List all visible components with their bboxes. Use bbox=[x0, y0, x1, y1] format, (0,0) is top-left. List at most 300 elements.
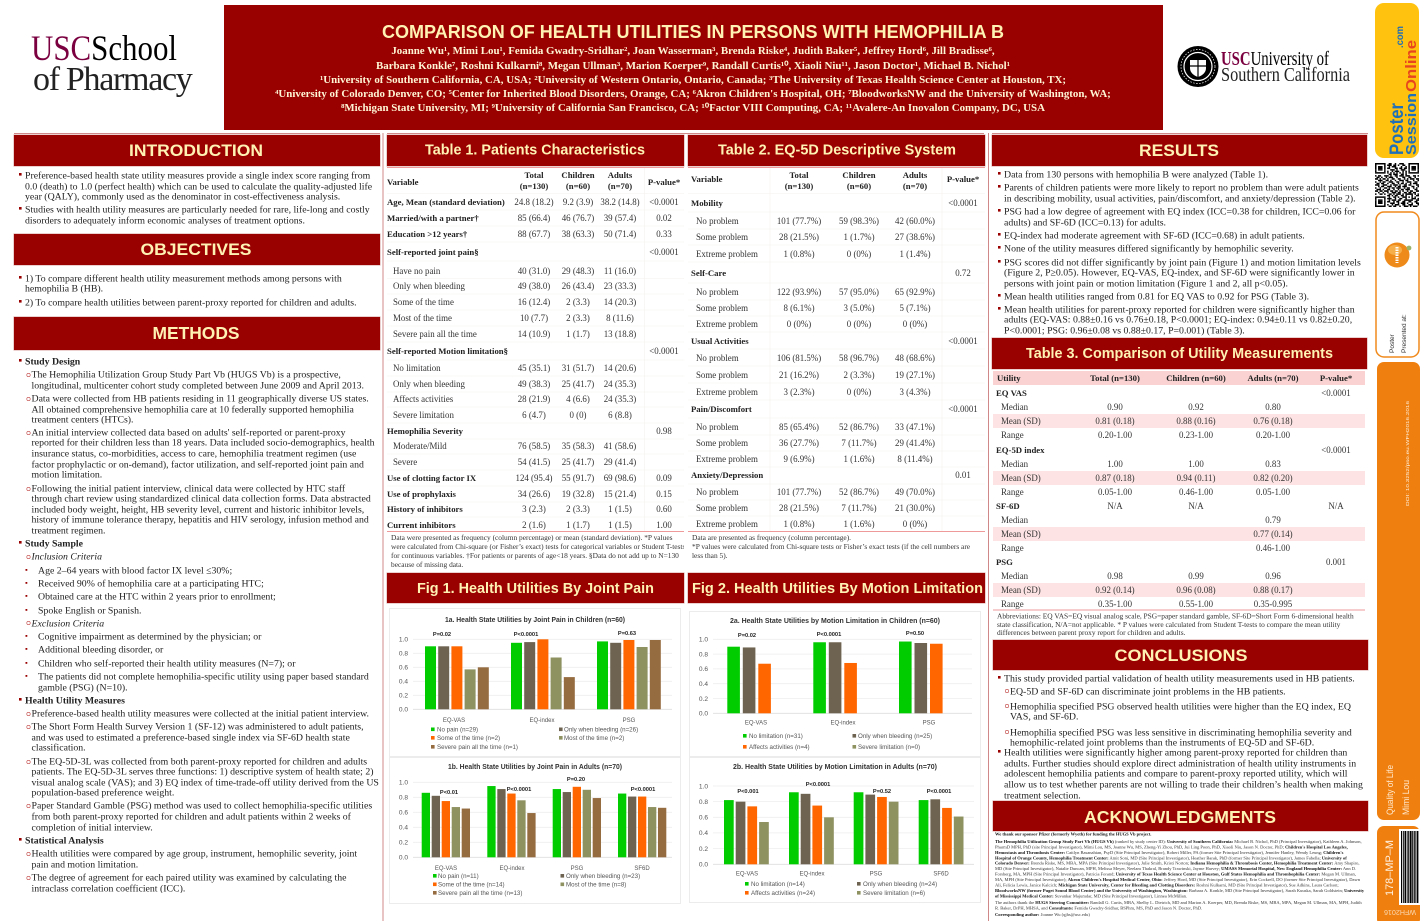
table: comparison of utility measurements: Range bbox=[1001, 430, 1024, 440]
text block: methods: Age 2–64 years with blood factor IX level ≤30%; bbox=[38, 566, 232, 577]
table: EQ-5D descriptive system: 1 (1.7%) bbox=[843, 232, 875, 242]
table: comparison of utility measurements: PSG bbox=[996, 557, 1013, 567]
table: patients characteristics: Use of clotting factor IX bbox=[387, 473, 477, 483]
text block: results bullets: adults) and SF-6D (ICC=0.13) for adults. bbox=[1004, 218, 1166, 229]
table: comparison of utility measurements: 0.35-1.00 bbox=[1098, 599, 1133, 609]
table: EQ-5D descriptive system: Extreme problem bbox=[696, 387, 758, 397]
table: patients characteristics: 34 (26.6) bbox=[518, 489, 550, 499]
table: patients characteristics: 85 (66.4) bbox=[518, 213, 550, 223]
chart: 2b motion limitation in adults: Affects activities (n=24) bbox=[751, 890, 815, 897]
heading: table 1: Table 1. Patients Characteristics bbox=[425, 142, 645, 158]
text block: methods: history of immune tolerance therapy, hepatitis and HIV serology, infusion method and bbox=[32, 515, 369, 526]
table: patients characteristics: 124 (95.4) bbox=[516, 473, 553, 483]
table: patients characteristics: 28 (21.9) bbox=[518, 394, 550, 404]
panel: acknowledgments bbox=[992, 800, 1368, 917]
heading: table 2: Table 2. EQ-5D Descriptive System bbox=[718, 142, 956, 158]
heading: figure 2: Fig 2. Health Utilities By Motion Limitation bbox=[692, 581, 983, 597]
table: patients characteristics: 41 (58.6) bbox=[604, 441, 636, 451]
table: patients characteristics: 0.98 bbox=[656, 426, 672, 436]
table: patients characteristics: 10 (7.7) bbox=[520, 313, 548, 323]
chart: 1a joint pain in children: 0.4 bbox=[399, 679, 408, 686]
table: EQ-5D descriptive system: 27 (38.6%) bbox=[895, 232, 935, 242]
table: EQ-5D descriptive system: 36 (27.7%) bbox=[779, 438, 819, 448]
chart: 2a motion limitation in children: P<0.0001 bbox=[817, 632, 841, 638]
text block: methods: through chart review using standardized clinical data collection forms. Data abstracted bbox=[32, 494, 371, 505]
table: comparison of utility measurements: Total (n=130) bbox=[1090, 373, 1140, 383]
table: patients characteristics: 29 (48.3) bbox=[562, 266, 594, 276]
chart: 1b joint pain in adults: Only when bleeding (n=23) bbox=[566, 873, 640, 880]
text block: methods: longitudinal, multicenter cohort study completed between June 2009 and April 2013. bbox=[32, 381, 364, 392]
table: EQ-5D descriptive system: 8 (6.1%) bbox=[783, 303, 815, 313]
text block: methods: Statistical Analysis bbox=[25, 836, 104, 847]
chart: 1a joint pain in children: P=0.63 bbox=[618, 631, 636, 637]
table 3 footnote bbox=[997, 612, 1354, 637]
text block: methods: Paper Standard Gamble (PSG) method was used to collect hemophilia-specific utilities bbox=[32, 801, 372, 812]
table: EQ-5D descriptive system: 8 (11.4%) bbox=[897, 454, 933, 464]
table: EQ-5D descriptive system: 101 (77.7%) bbox=[777, 487, 821, 497]
chart: 2b motion limitation in adults: Only when bleeding (n=24) bbox=[863, 881, 937, 888]
sidebar: PosterSessionOnline badge: Poster bbox=[1387, 102, 1408, 155]
table: EQ-5D descriptive system: Some problem bbox=[696, 438, 748, 448]
chart: 2a motion limitation in children: Only when bleeding (n=25) bbox=[858, 733, 932, 740]
sidebar: orange DOI and topic band: Quality of Life bbox=[1385, 765, 1395, 815]
chart: 1b joint pain in adults: EQ-index bbox=[499, 866, 525, 872]
table: comparison of utility measurements: 0.88 (0.16) bbox=[1176, 416, 1216, 426]
table: patients characteristics: 2 (3.3) bbox=[566, 504, 590, 514]
table: EQ-5D descriptive system: 3 (2.3%) bbox=[783, 387, 815, 397]
text block: methods: population-based preference weight. bbox=[32, 788, 174, 799]
text block: conclusions bullets: hemophilic-related joint problems than the instruments of EQ-5D and SF-6D. bbox=[1010, 738, 1314, 749]
table: comparison of utility measurements: SF-6D bbox=[996, 501, 1020, 511]
table: patients characteristics: History of inhibitors bbox=[387, 504, 463, 514]
table: EQ-5D descriptive system: <0.0001 bbox=[948, 336, 978, 346]
table: EQ-5D descriptive system: No problem bbox=[696, 216, 739, 226]
heading: conclusions: CONCLUSIONS bbox=[1114, 646, 1248, 665]
chart: 2a motion limitation in children: EQ-index bbox=[830, 720, 856, 726]
table: patients characteristics: 88 (67.7) bbox=[518, 229, 550, 239]
chart: 1a joint pain in children: 1.0 bbox=[399, 637, 408, 644]
table: patients characteristics: 2 (3.3) bbox=[566, 297, 590, 307]
table: comparison of utility measurements: 0.96 (0.08) bbox=[1176, 585, 1216, 595]
chart: 2b motion limitation in adults: PSG bbox=[870, 872, 883, 878]
table: patients characteristics: Use of prophylaxis bbox=[387, 489, 456, 499]
text block: methods: treatment centers (HTCs). bbox=[32, 415, 134, 426]
table: patients characteristics: <0.0001 bbox=[649, 197, 679, 207]
table: patients characteristics: No limitation bbox=[393, 363, 441, 373]
text block: methods: Following the initial patient interview, clinical data were collected by HTC staff bbox=[32, 484, 346, 495]
table: patients characteristics: 25 (41.7) bbox=[562, 457, 594, 467]
text block: conclusions bullets bbox=[998, 674, 1363, 800]
chart: 1b joint pain in adults: 0.6 bbox=[399, 810, 408, 817]
table: EQ-5D descriptive system: Some problem bbox=[696, 370, 748, 380]
text block: methods: Health Utility Measures bbox=[25, 696, 125, 707]
table: comparison of utility measurements: N/A bbox=[1328, 501, 1344, 511]
text block: introduction bullets: year (QALY), commonly used as the denominator in cost-effectiveness analysis. bbox=[25, 192, 340, 203]
table: comparison of utility measurements: 0.80 bbox=[1265, 402, 1281, 412]
sidebar: presented-at box: Poster bbox=[1389, 333, 1396, 353]
text block: acknowledgments: BloodworksNW (former Puget Sound Blood Center) and the University of Washington, Washington: Barbara A. Konkle, MD (Site Principal Investigator), Sarah Kuuska, Sarah Goldstein; University bbox=[995, 888, 1365, 894]
text block: conclusions bullets: VAS, and SF-6D. bbox=[1010, 712, 1078, 723]
chart: 2a motion limitation in children: Affects activities (n=4) bbox=[749, 744, 810, 751]
chart: 2a motion limitation in children: 0.0 bbox=[699, 711, 708, 718]
table: EQ-5D descriptive system: 0 (0%) bbox=[847, 319, 871, 329]
table: comparison of utility measurements: 0.46-1.00 bbox=[1256, 543, 1291, 553]
barcode bbox=[1401, 831, 1418, 903]
table: comparison of utility measurements: 0.05-1.00 bbox=[1256, 487, 1291, 497]
table: patients characteristics: Married/with a partner† bbox=[387, 213, 479, 223]
table: comparison of utility measurements: N/A bbox=[1107, 501, 1123, 511]
text block: conclusions bullets: This study provided partial validation of health utility measurements used in HB patients. bbox=[1004, 674, 1355, 685]
table: patients characteristics: 49 (38.3) bbox=[518, 379, 550, 389]
chart: 1b joint pain in adults: 0.0 bbox=[399, 855, 408, 862]
table: EQ-5D descriptive system: Extreme problem bbox=[696, 249, 758, 259]
chart: 2b motion limitation in adults: P<0.001 bbox=[737, 789, 759, 795]
table: EQ-5D descriptive system: 3 (5.0%) bbox=[843, 303, 875, 313]
chart: 1a joint pain in children: 0.0 bbox=[399, 707, 408, 714]
chart: 2a motion limitation in children: 2a. Health State Utilities by Motion Limitation in Children (n=60) bbox=[730, 618, 940, 625]
sidebar: PosterSessionOnline badge bbox=[1375, 3, 1419, 158]
table: comparison of utility measurements: 1.00 bbox=[1107, 459, 1123, 469]
text block: methods: Exclusion Criteria bbox=[30, 619, 104, 630]
table: comparison of utility measurements: N/A bbox=[1188, 501, 1204, 511]
table: EQ-5D descriptive system: 1 (0.8%) bbox=[783, 249, 815, 259]
table: EQ-5D descriptive system: 2 (3.3%) bbox=[843, 370, 875, 380]
table: EQ-5D descriptive system: 21 (30.0%) bbox=[895, 503, 935, 513]
table: patients characteristics: Affects activities bbox=[393, 394, 454, 404]
table: patients characteristics: 2 (3.3) bbox=[566, 313, 590, 323]
table: patients characteristics: 25 (41.7) bbox=[562, 379, 594, 389]
table: patients characteristics: (n=130) bbox=[520, 181, 548, 191]
table: comparison of utility measurements: P-value* bbox=[1320, 373, 1352, 383]
logo: University of Southern California bbox=[1178, 46, 1350, 87]
text block: methods: Spoke English or Spanish. bbox=[38, 606, 141, 617]
table: patients characteristics: 2 (1.6) bbox=[522, 520, 546, 530]
chart: 2b motion limitation in adults: P<0.0001 bbox=[806, 782, 830, 788]
text block: methods: completion of initial interview. bbox=[32, 823, 153, 834]
table: patients characteristics: 24.8 (18.2) bbox=[514, 197, 554, 207]
table: patients characteristics: (n=70) bbox=[608, 181, 632, 191]
text block: methods: Children who self-reported their health utility measures (N=7); or bbox=[38, 659, 296, 670]
chart: 2b motion limitation in adults: 0.2 bbox=[699, 846, 708, 853]
heading: methods bbox=[14, 317, 380, 350]
table: patients characteristics: 11 (16.0) bbox=[604, 266, 636, 276]
table: patients characteristics: P-value* bbox=[648, 177, 680, 187]
panel: conclusions bbox=[992, 640, 1368, 800]
table: comparison of utility measurements: 0.20-1.00 bbox=[1098, 430, 1133, 440]
logo: USC School of Pharmacy: of Pharmacy bbox=[33, 61, 193, 98]
table: patients characteristics: 24 (35.3) bbox=[604, 394, 636, 404]
text block: conclusions bullets: Health utilities were significantly higher among parent-proxy reported for children than bbox=[1004, 748, 1347, 759]
text block: methods: Study Sample bbox=[25, 539, 84, 550]
chart: 1b joint pain in adults: P<0.0001 bbox=[631, 787, 655, 793]
table: patients characteristics: 1 (1.5) bbox=[608, 520, 632, 530]
text block: results bullets: Parents of children patients were more likely to report no problem than were adult patients bbox=[1004, 183, 1359, 194]
table: patients characteristics: 23 (33.3) bbox=[604, 281, 636, 291]
chart: 1a joint pain in children: 0.2 bbox=[399, 693, 408, 700]
chart: 2b motion limitation in adults: 1.0 bbox=[699, 783, 708, 790]
chart: 1b joint pain in adults: 1b. Health State Utilities by Joint Pain in Adults (n=70) bbox=[448, 764, 622, 771]
text block: conclusions bullets: Hemophilia specified PSG was less sensitive in discriminating hemophilia severity and bbox=[1010, 728, 1352, 739]
text block: acknowledgments: MA, MPH (Site Principal Investigator); Akron Children's Hospital Medical Center, Ohio: Jeffrey Hord, MD (Site Principal Investigator), Erin Cockrell, DO (former Site Principal Investigator), Dawn bbox=[995, 877, 1361, 883]
text block: conclusions bullets: allow us to test whether parents are not willing to trade their children’s health when making bbox=[1004, 780, 1363, 791]
table: EQ-5D descriptive system: (n=130) bbox=[785, 181, 813, 191]
chart: 2b motion limitation in adults: SF6D bbox=[933, 872, 949, 878]
table: comparison of utility measurements: 0.23-1.00 bbox=[1179, 430, 1214, 440]
logo: USC School of Pharmacy: USCSchool bbox=[31, 28, 177, 68]
table 1 footnote: because of missing data. bbox=[391, 560, 463, 569]
table: EQ-5D descriptive system: 0 (0%) bbox=[847, 387, 871, 397]
table: patients characteristics: 15 (21.4) bbox=[604, 489, 636, 499]
table: comparison of utility measurements: <0.0001 bbox=[1321, 388, 1351, 398]
table: patients characteristics: 14 (10.9) bbox=[518, 329, 550, 339]
table: patients characteristics: 24 (35.3) bbox=[604, 379, 636, 389]
panel: table 1 bbox=[386, 134, 684, 569]
heading: introduction: INTRODUCTION bbox=[129, 141, 263, 160]
sidebar: presented-at box: Presented at: bbox=[1401, 314, 1408, 353]
table: EQ-5D descriptive system bbox=[688, 167, 985, 532]
text block: introduction bullets bbox=[19, 171, 373, 227]
table: EQ-5D descriptive system: Extreme problem bbox=[696, 519, 758, 529]
table: patients characteristics: 0.33 bbox=[656, 229, 672, 239]
table: EQ-5D descriptive system: Some problem bbox=[696, 503, 748, 513]
text block: methods: motion limitation. bbox=[32, 470, 102, 481]
text block: methods: All obtained comprehensive hemophilia care at 10 federally supported hemophilia bbox=[32, 405, 355, 416]
chart: 1b joint pain in adults: EQ-VAS bbox=[435, 866, 457, 872]
chart: 2b motion limitation in adults: EQ-index bbox=[799, 872, 825, 878]
text block: results bullets: (Figure 2, P≥0.05). However, EQ-VAS, EQ-index, and SF-6D were significantly lower in bbox=[1004, 268, 1355, 279]
text block: results bullets bbox=[998, 170, 1361, 337]
text block: introduction bullets: 0.0 (death) to 1.0 (perfect health) which can be used to calculate the quality-adjusted life bbox=[25, 182, 373, 193]
table: EQ-5D descriptive system: 0 (0%) bbox=[847, 249, 871, 259]
table: EQ-5D descriptive system: (n=60) bbox=[847, 181, 871, 191]
table: comparison of utility measurements: 0.87 (0.18) bbox=[1095, 473, 1135, 483]
table: comparison of utility measurements: 0.81 (0.18) bbox=[1095, 416, 1135, 426]
text block: results bullets: P<0.0001; PSG: 0.96±0.08 vs 0.88±0.17, P=0.001) (Table 3). bbox=[1004, 326, 1245, 337]
table: EQ-5D descriptive system: 0.01 bbox=[955, 470, 971, 480]
title banner bbox=[224, 5, 1163, 130]
table 1 footnote: for continuous variables. †For patients or parents of age<18 years. §Data do not add up to N=130 bbox=[391, 551, 679, 560]
text block: objectives bullets: 1) To compare different health utility measurement methods among persons with bbox=[25, 274, 342, 285]
table: patients characteristics: 9.2 (3.9) bbox=[563, 197, 593, 207]
table: patients characteristics: 0.09 bbox=[656, 473, 672, 483]
text block: methods: factor prophylactic or on-demand), factor utilization, and self-reported joint pain and bbox=[32, 460, 364, 471]
table: patients characteristics: Total bbox=[524, 170, 544, 180]
logo: USC School of Pharmacy bbox=[31, 28, 193, 98]
text block: acknowledgments: PharmD MPH, PhD (site Principal Investigator), Mimi Lou, MS, Joanne Wu, MS, Zheng-Yi Zhou, PhD, Jui Ling Poon, PhD, Xiaoli Niu, Jason N. Doctor, PhD; Children's Hospital Los Angeles, bbox=[995, 844, 1348, 850]
sidebar: orange DOI and topic band: DOI: 10.3252/pso.eu.WFH2016.2016 bbox=[1405, 401, 1411, 506]
chart: 2a motion limitation in children: P=0.02 bbox=[738, 633, 756, 639]
table: comparison of utility measurements: 0.77 (0.14) bbox=[1253, 529, 1293, 539]
heading: results bbox=[992, 135, 1367, 166]
table: patients characteristics: 8 (11.6) bbox=[606, 313, 634, 323]
panel: objectives bbox=[14, 234, 380, 309]
table: EQ-5D descriptive system: <0.0001 bbox=[948, 404, 978, 414]
text block: methods: The Short Form Health Survey Version 1 (SF-12) was administered to adult patients, bbox=[32, 722, 364, 733]
sidebar: QR code bbox=[1375, 163, 1419, 207]
table: EQ-5D descriptive system: Usual Activities bbox=[691, 336, 749, 346]
table: EQ-5D descriptive system: 1 (0.8%) bbox=[783, 519, 815, 529]
table: patients characteristics: 38.2 (14.8) bbox=[600, 197, 640, 207]
table: EQ-5D descriptive system: 57 (95.0%) bbox=[839, 287, 879, 297]
text block: methods: The Hemophilia Utilization Group Study Part Vb (HUGS Vb) is a prospective, bbox=[32, 370, 341, 381]
chart: 1a joint pain in children: Only when bleeding (n=26) bbox=[564, 726, 638, 734]
table: patients characteristics: 0.02 bbox=[656, 213, 672, 223]
chart: 1b joint pain in adults: 1.0 bbox=[399, 780, 408, 787]
authors and affiliations: Joanne Wu¹, Mimi Lou¹, Femida Gwadry-Sridhar², Joan Wasserman³, Brenda Riske⁴, Judith Baker⁵, Jeffrey Hord⁶, Jill Bradisse⁶, bbox=[391, 45, 995, 57]
text block: methods: Preference-based health utility measures were collected at the initial patient interview. bbox=[32, 709, 369, 720]
heading: acknowledgments bbox=[993, 801, 1368, 831]
table: EQ-5D descriptive system: 0 (0%) bbox=[787, 319, 811, 329]
text block: methods: Cognitive impairment as determined by the physician; or bbox=[38, 632, 262, 643]
table: patients characteristics: 14 (20.6) bbox=[604, 363, 636, 373]
table: comparison of utility measurements: Range bbox=[1001, 543, 1024, 553]
table: patients characteristics: 6 (8.8) bbox=[608, 410, 632, 420]
chart: 2b motion limitation in adults: 0.8 bbox=[699, 799, 708, 806]
table: EQ-5D descriptive system: 106 (81.5%) bbox=[777, 353, 821, 363]
chart: 1b joint pain in adults: P<0.0001 bbox=[507, 787, 531, 793]
chart: 1a joint pain in children: Some of the time (n=2) bbox=[437, 735, 500, 742]
table: EQ-5D descriptive system: P-value* bbox=[947, 174, 979, 184]
table: patients characteristics: 0 (0) bbox=[569, 410, 587, 420]
table: EQ-5D descriptive system: Mobility bbox=[691, 198, 724, 208]
heading: table 2 bbox=[688, 135, 985, 166]
table: patients characteristics: 40 (31.0) bbox=[518, 266, 550, 276]
text block: methods: Data were collected from HB patients residing in 11 geographically diverse US states. bbox=[32, 394, 369, 405]
table: comparison of utility measurements: Mean (SD) bbox=[1001, 473, 1041, 483]
table: patients characteristics: 1 (1.5) bbox=[608, 504, 632, 514]
table: EQ-5D descriptive system: 85 (65.4%) bbox=[779, 422, 819, 432]
table: comparison of utility measurements: Adults (n=70) bbox=[1247, 373, 1299, 383]
table: EQ-5D descriptive system: 1 (1.4%) bbox=[899, 249, 931, 259]
table: comparison of utility measurements: 0.92 (0.14) bbox=[1095, 585, 1135, 595]
table: patients characteristics: 16 (12.4) bbox=[518, 297, 550, 307]
table: patients characteristics: 54 (41.5) bbox=[518, 457, 550, 467]
chart: 1a joint pain in children: No pain (n=29) bbox=[437, 726, 478, 734]
text block: methods: An initial interview collected data based on adults' self-reported or parent-proxy bbox=[32, 428, 346, 439]
text block: methods: and was used to estimated a preference-based single index via SF-6D health state bbox=[32, 733, 350, 744]
chart: 2b motion limitation in adults: Severe limitation (n=6) bbox=[863, 890, 925, 897]
heading: introduction bbox=[14, 135, 380, 166]
heading: methods: METHODS bbox=[152, 323, 240, 343]
chart: 2a motion limitation in children: 0.4 bbox=[699, 681, 708, 688]
table: patients characteristics: 4 (6.6) bbox=[566, 394, 590, 404]
panel: table 2 bbox=[688, 134, 986, 560]
text block: acknowledgments: The authors thank the HUGS Steering Committee: Randall G. Curtis, MBA, Shelby L. Dietrich, MD and Marion A. Koerper, MD, Brenda Riske, MS, MBA, MPA, Megan M. Ullman, MA, MPH, Judith bbox=[995, 900, 1362, 906]
text block: results bullets: in describing mobility, usual activities, pain/discomfort, and anxiety/depression (Table 2). bbox=[1004, 194, 1356, 205]
sidebar: presented-at box bbox=[1375, 211, 1420, 358]
chart: 1b joint pain in adults: No pain (n=11) bbox=[438, 873, 479, 880]
table: comparison of utility measurements: Median bbox=[1001, 515, 1029, 525]
text block: methods: The patients did not complete hemophilia-specific utility using paper based standard bbox=[38, 672, 369, 683]
logo: University of Southern California: USCUniversity of bbox=[1221, 49, 1329, 70]
table: comparison of utility measurements: 0.88 (0.17) bbox=[1253, 585, 1293, 595]
icon: university seal bbox=[1178, 46, 1218, 87]
text block: methods: included body weight, height, HB severity level, current and historic inhibitor levels, bbox=[32, 505, 364, 516]
table 3 footnote: state classification, N/A=not applicable. * P values were calculated from Student T-tests to compare the mean utility bbox=[997, 620, 1341, 629]
table: comparison of utility measurements: 0.96 bbox=[1265, 571, 1281, 581]
chart: 1a joint pain in children: 0.8 bbox=[399, 651, 408, 658]
text block: results bullets: None of the utility measures differed significantly by hemophilic severity. bbox=[1004, 244, 1294, 255]
chart: 1a joint pain in children: P<0.0001 bbox=[514, 632, 538, 638]
chart: 1b joint pain in adults: P<0.01 bbox=[440, 790, 458, 796]
chart: 1a joint pain in children: EQ-index bbox=[529, 718, 555, 724]
table: EQ-5D descriptive system: 7 (11.7%) bbox=[841, 503, 877, 513]
table: EQ-5D descriptive system: 0.72 bbox=[955, 268, 971, 278]
chart: 2b motion limitation in adults: P=0.52 bbox=[873, 789, 891, 795]
table: patients characteristics: 45 (35.1) bbox=[518, 363, 550, 373]
table: comparison of utility measurements: 0.46-1.00 bbox=[1179, 487, 1214, 497]
table: patients characteristics: 76 (58.5) bbox=[518, 441, 550, 451]
table: comparison of utility measurements: 0.98 bbox=[1107, 571, 1123, 581]
table: EQ-5D descriptive system: Extreme problem bbox=[696, 319, 758, 329]
table: EQ-5D descriptive system: 1 (1.6%) bbox=[843, 454, 875, 464]
table: patients characteristics: Severe pain all the time bbox=[393, 329, 477, 339]
text block: objectives bullets bbox=[19, 274, 357, 309]
table: comparison of utility measurements: 0.90 bbox=[1107, 402, 1123, 412]
sidebar: orange DOI and topic band: Mimi Lou bbox=[1401, 780, 1411, 815]
chart: 2a motion limitation in children: P=0.50 bbox=[906, 631, 924, 637]
table: comparison of utility measurements: Utility bbox=[997, 373, 1021, 383]
chart: 2b motion limitation in adults: 2b. Health State Utilities by Motion Limitation in Adults (n=70) bbox=[733, 764, 937, 771]
authors and affiliations: Barbara Konkle⁷, Roshni Kulkarni⁸, Megan Ullman³, Marion Koerper⁹, Randall Curtis¹⁰, Xiaoli Niu¹¹, Jason Doctor¹, Michael B. Nichol¹ bbox=[376, 60, 1010, 72]
table 2 footnote: *P values were calculated from Chi-square tests or Fisher’s exact tests (if the cell numbers are bbox=[692, 542, 971, 551]
table: EQ-5D descriptive system: 7 (11.7%) bbox=[841, 438, 877, 448]
text block: methods bbox=[19, 357, 379, 893]
heading: objectives: OBJECTIVES bbox=[140, 240, 252, 259]
table: patients characteristics: 1.00 bbox=[656, 520, 672, 530]
table: EQ-5D descriptive system: 28 (21.5%) bbox=[779, 503, 819, 513]
text block: results bullets: adults (EQ-VAS: 0.88±0.16 vs 0.76±0.18, P<0.0001; EQ-index: 0.94±0.11 vs 0.82±0.20, bbox=[1004, 315, 1352, 326]
table: EQ-5D descriptive system: 29 (41.4%) bbox=[895, 438, 935, 448]
text block: introduction bullets: disorders to adequately inform economic analyses of treatment options. bbox=[25, 216, 305, 227]
panel: introduction bbox=[14, 134, 380, 227]
table: EQ-5D descriptive system: No problem bbox=[696, 487, 739, 497]
table: patients characteristics: Current inhibitors bbox=[387, 520, 456, 530]
table: comparison of utility measurements: Median bbox=[1001, 459, 1029, 469]
chart: 1b joint pain in adults: Some of the time (n=14) bbox=[438, 882, 505, 888]
table: patients characteristics: 35 (58.3) bbox=[562, 441, 594, 451]
text block: acknowledgments: Hemostasis and Thrombosis Center: Caitlyn Basanahian, PsyD (Site Principal Investigator), Robert Miller, PA (former Site Principal Investigator), Jennifer Hanley, Wendy Leung; Children's bbox=[995, 850, 1344, 856]
panel: figure 2 bbox=[688, 572, 986, 903]
table: comparison of utility measurements: Range bbox=[1001, 487, 1024, 497]
table: comparison of utility measurements: 0.20-1.00 bbox=[1256, 430, 1291, 440]
chart: 1b joint pain in adults: Severe pain all the time (n=13) bbox=[438, 890, 522, 897]
table: comparison of utility measurements: 0.94 (0.11) bbox=[1177, 473, 1215, 483]
authors and affiliations bbox=[275, 45, 1111, 114]
table: EQ-5D descriptive system: 28 (21.5%) bbox=[779, 232, 819, 242]
table: EQ-5D descriptive system: Children bbox=[842, 170, 876, 180]
chart: 1a joint pain in children: Most of the time (n=2) bbox=[564, 735, 624, 742]
text block: methods: Study Design bbox=[25, 357, 81, 368]
text block: methods: The degree of agreement for each paired utility was examined by calculating the bbox=[32, 873, 347, 884]
table: patients characteristics: 3 (2.3) bbox=[522, 504, 546, 514]
chart: 2b motion limitation in adults: P<0.0001 bbox=[927, 789, 951, 795]
text block: acknowledgments bbox=[995, 832, 1365, 917]
table: patients characteristics: Self-reported joint pain§ bbox=[387, 247, 479, 257]
text block: results bullets: PSG scores did not differ significantly by joint pain (Figure 1) and motion limitation levels bbox=[1004, 258, 1361, 269]
text block: methods: Health utilities were compared by age group, instrument, hemophilic severity, joint bbox=[32, 849, 357, 860]
panel: methods bbox=[14, 316, 380, 893]
text block: acknowledgments: Forsberg, MA, MPH (Site Principal Investigator), Patricia Forand; University of Texas Health Science Center at Houston, Gulf States Hemophilia and Thrombophilia Center: Megan M. Ullman, bbox=[995, 872, 1356, 878]
text block: results bullets: Mean health utilities for parent-proxy reported for children were significantly higher than bbox=[1004, 305, 1355, 316]
text block: objectives bullets: hemophilia B (HB). bbox=[25, 284, 103, 295]
chart: 1a joint pain in children: 0.6 bbox=[399, 665, 408, 672]
table: comparison of utility measurements: 0.35-0.995 bbox=[1254, 599, 1293, 609]
table: EQ-5D descriptive system: No problem bbox=[696, 422, 739, 432]
table: comparison of utility measurements: Children (n=60) bbox=[1166, 373, 1226, 383]
table: patients characteristics: 19 (32.8) bbox=[562, 489, 594, 499]
text block: introduction bullets: Studies with health utility measures are particularly needed for rare, life-long and costly bbox=[25, 205, 370, 216]
